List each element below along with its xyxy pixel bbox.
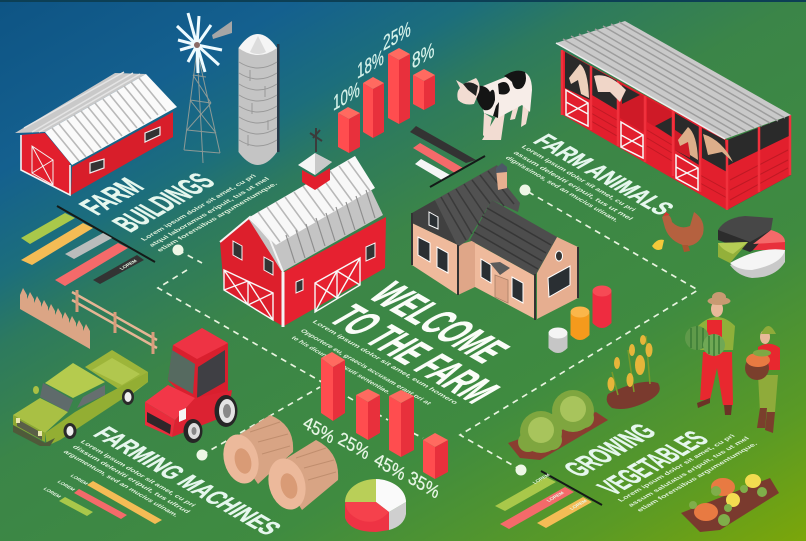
bar legend: farm buildings: LOREM	[119, 259, 139, 271]
icon: vegetable bed	[681, 474, 779, 532]
heading: welcome to the farm: TO THE FARM	[317, 299, 510, 410]
heading: farm buildings: BUILDINGS	[104, 168, 223, 237]
bar chart: percentages top	[333, 17, 435, 153]
cylinder chart	[548, 286, 612, 353]
text block: farm buildings	[140, 173, 280, 253]
bar chart: percentages top: 8%	[412, 38, 435, 74]
text block: farming machines: Lorem ipsum dolor sit amet, cu pri	[78, 439, 197, 508]
dashed connector lines	[158, 184, 698, 476]
text block: farming machines: dissum deleniti eripuit, tus ultrud	[70, 444, 192, 515]
text block: farm buildings: Lorem ipsum dolor sit amet, cu pri	[140, 173, 259, 242]
bar legend: growing vegetables: LOREM	[532, 473, 552, 485]
icon: pickup truck	[13, 350, 148, 446]
icon: farmer woman with basket	[745, 326, 780, 433]
bar chart: percentages top: 18%	[357, 45, 384, 84]
bar legend: farming machines	[41, 474, 162, 524]
heading: farm buildings: FARM	[71, 173, 152, 220]
bar chart: percentages top: 10%	[333, 77, 360, 116]
panel: farm house	[412, 163, 578, 320]
text block: farming machines	[61, 439, 197, 518]
bar legend: growing vegetables: LOREM	[546, 491, 566, 503]
heading: welcome to the farm: WELCOME	[357, 276, 519, 370]
text block: farm buildings: atqui laboramus eripuit, tus ut mel	[148, 176, 272, 248]
bar legend: farming machines: LOREM	[68, 474, 89, 486]
icon: picket fence	[20, 288, 90, 349]
heading: farm buildings	[71, 168, 223, 237]
text block: farm animals: dignissimos, sed an mucius utinam.	[503, 155, 620, 223]
icon: rail fence	[72, 290, 157, 354]
panel: farm buildings barn	[15, 72, 177, 195]
bar legend: growing vegetables	[495, 471, 602, 529]
bar legend: growing vegetables: LOREM	[569, 499, 589, 511]
bar chart: percentages bottom: 25%	[336, 427, 372, 464]
heading: growing vegetables: VEGETABLES	[590, 426, 716, 500]
heading: growing vegetables	[556, 419, 716, 500]
pie chart: farming machines	[345, 479, 406, 532]
text block: growing vegetables: Lorem ipsum dolor sit amet, cu pri	[617, 433, 737, 503]
icon: corn plants	[607, 335, 660, 409]
bar legend: farming machines: LOREM	[41, 487, 62, 499]
icon: hen and chick	[652, 212, 704, 252]
text block: farm animals: assum deleniti eripuit, tus ut mel	[511, 150, 634, 222]
bar legend: farming machines: LOREM	[55, 480, 76, 492]
icon: grain silo	[238, 34, 280, 165]
bar chart: percentages top: 25%	[383, 17, 411, 56]
text block: growing vegetables	[617, 433, 760, 513]
bar chart: percentages bottom: 45%	[372, 448, 408, 485]
text block: farm buildings: etiam forensibus argumentumque.	[156, 181, 280, 253]
text block: welcome	[289, 319, 459, 406]
icon: cabbages	[508, 390, 608, 460]
bar legend: farm animals	[410, 126, 485, 187]
heading: welcome to the farm	[317, 276, 519, 410]
icon: farmer man with watermelons	[685, 292, 735, 415]
panel: main barn	[220, 128, 386, 327]
text block: welcome: Opportere eu, graecis accusam erant pri at	[298, 328, 433, 406]
heading: farm animals: FARM ANIMALS	[527, 130, 681, 219]
text block: farm animals: Lorem ipsum dolor sit amet, cu pri	[519, 144, 637, 213]
text block: farming machines: argumentum, sed an mucius utinam.	[61, 449, 180, 518]
heading: growing vegetables: GROWING	[556, 419, 664, 482]
panel: stable with horses	[556, 21, 791, 210]
text block: welcome: Lorem ipsum dolor sit amet, eum homero	[310, 319, 459, 406]
bar legend: farm buildings	[21, 206, 155, 286]
bar chart: percentages bottom: 35%	[406, 466, 442, 503]
icon: cow	[456, 71, 532, 140]
icon: hay bales	[218, 415, 338, 514]
bar chart: percentages bottom	[301, 352, 448, 503]
pie chart: farm animals	[718, 216, 785, 278]
icon: tractor	[145, 328, 238, 443]
icon: windmill	[177, 13, 232, 163]
text block: growing vegetables: etiam forensibus argumentumque.	[636, 441, 760, 513]
text block: welcome: te his dicunt persecuti sententiae.	[289, 335, 393, 395]
text block: growing vegetables: assum salutatus eripuit, tus ut mel	[627, 436, 752, 508]
text block: farm animals	[503, 144, 637, 223]
bar chart: percentages bottom: 45%	[301, 411, 337, 448]
